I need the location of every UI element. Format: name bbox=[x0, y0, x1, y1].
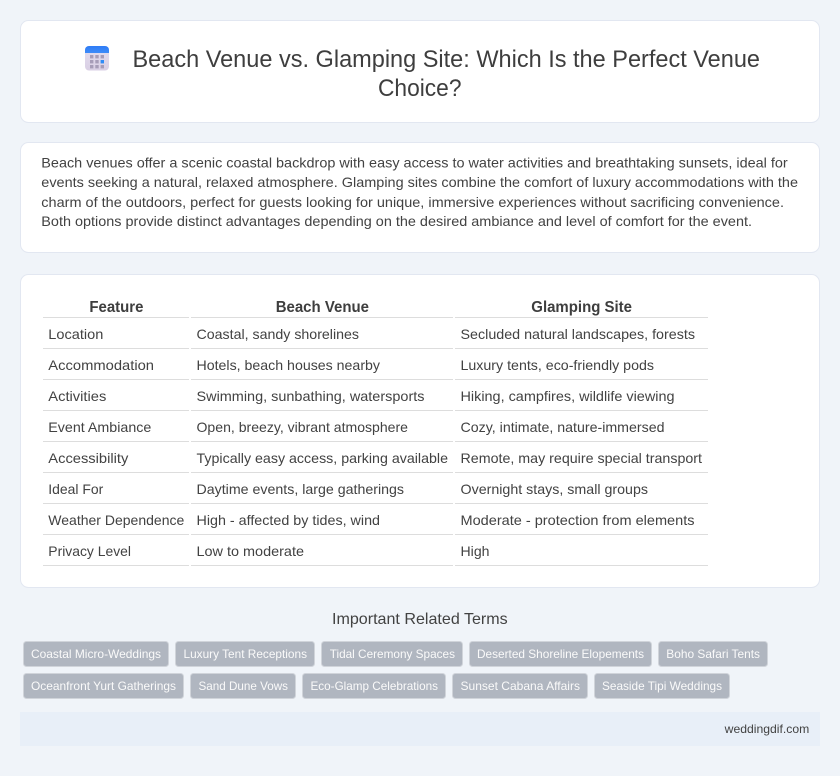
row: Event Ambiance: Open, breezy, vibrant atmosphere bbox=[196, 419, 408, 435]
chip bbox=[470, 642, 652, 666]
chip: Sunset Cabana Affairs bbox=[460, 679, 580, 693]
intro paragraph: Both options provide distinct advantages depending on the desired ambiance and level of comfort for the event. bbox=[41, 213, 752, 229]
row: Weather Dependence: Weather Dependence bbox=[48, 512, 185, 528]
row: Ideal For: Ideal For bbox=[48, 481, 104, 497]
chip bbox=[594, 674, 730, 698]
row: Ideal For bbox=[48, 481, 648, 497]
row: Location: Coastal, sandy shorelines bbox=[196, 326, 359, 342]
chip: Eco-Glamp Celebrations bbox=[310, 679, 438, 693]
chip bbox=[176, 642, 314, 666]
intro paragraph: charm of the outdoors, perfect for guests looking for unique, immersive experiences without sacrificing convenience. bbox=[41, 194, 784, 210]
chip: Tidal Ceremony Spaces bbox=[330, 647, 455, 661]
panel: intro text bbox=[20, 142, 820, 252]
row: Activities bbox=[48, 388, 675, 404]
heading: related terms: Important Related Terms bbox=[332, 611, 508, 628]
chip: Boho Safari Tents bbox=[666, 647, 760, 661]
table header row: Glamping Site bbox=[531, 299, 632, 316]
chip: Luxury Tent Receptions bbox=[184, 647, 307, 661]
row: Accessibility: Typically easy access, parking available bbox=[196, 450, 448, 466]
row: Accommodation: Luxury tents, eco-friendly pods bbox=[460, 357, 654, 373]
chip bbox=[190, 674, 296, 698]
title bbox=[132, 46, 760, 102]
intro paragraph bbox=[41, 154, 798, 229]
intro paragraph: events seeking a natural, relaxed atmosphere. Glamping sites combine the comfort of luxury accommodations with the bbox=[41, 174, 798, 190]
chip: Deserted Shoreline Elopements bbox=[477, 647, 644, 661]
intro paragraph: Beach venues offer a scenic coastal backdrop with easy access to water activities and breathtaking sunsets, ideal for bbox=[41, 154, 788, 170]
row: Activities: Swimming, sunbathing, watersports bbox=[196, 388, 424, 404]
chip bbox=[322, 642, 462, 666]
row: Accessibility bbox=[48, 450, 702, 466]
row: Weather Dependence: Moderate - protection from elements bbox=[460, 512, 694, 528]
footer bbox=[20, 712, 820, 746]
row: Location: Location bbox=[48, 326, 103, 342]
row: Privacy Level: Privacy Level bbox=[48, 543, 131, 559]
row: Accommodation: Hotels, beach houses nearby bbox=[196, 357, 380, 373]
chip: Oceanfront Yurt Gatherings bbox=[31, 679, 176, 693]
footer: weddingdif.com bbox=[724, 722, 809, 736]
table header row: Feature bbox=[89, 299, 143, 316]
row: Event Ambiance bbox=[48, 419, 665, 435]
chip: Sand Dune Vows bbox=[198, 679, 288, 693]
row: Ideal For: Daytime events, large gatherings bbox=[196, 481, 404, 497]
row: Accessibility: Remote, may require special transport bbox=[460, 450, 702, 466]
chip bbox=[24, 674, 184, 698]
chip bbox=[24, 642, 168, 666]
related term chips bbox=[24, 642, 768, 698]
row: Activities: Activities bbox=[48, 388, 106, 404]
row: Event Ambiance: Event Ambiance bbox=[48, 419, 152, 435]
row: Accommodation bbox=[48, 357, 654, 373]
chip: Coastal Micro-Weddings bbox=[31, 647, 161, 661]
row: Activities: Hiking, campfires, wildlife viewing bbox=[460, 388, 674, 404]
chip bbox=[302, 674, 446, 698]
table header row: Beach Venue bbox=[276, 299, 369, 316]
row: Weather Dependence: High - affected by tides, wind bbox=[196, 512, 380, 528]
title: Choice? bbox=[378, 75, 462, 102]
row: Event Ambiance: Cozy, intimate, nature-immersed bbox=[460, 419, 664, 435]
chip bbox=[658, 642, 768, 666]
chip: Seaside Tipi Weddings bbox=[602, 679, 722, 693]
chip bbox=[452, 674, 588, 698]
row: Privacy Level: High bbox=[460, 543, 490, 559]
row: Weather Dependence bbox=[48, 512, 695, 528]
title: Beach Venue vs. Glamping Site: Which Is the Perfect Venue bbox=[132, 46, 760, 73]
row: Location: Secluded natural landscapes, forests bbox=[460, 326, 695, 342]
icon: calendar bbox=[85, 46, 109, 70]
row: Accessibility: Accessibility bbox=[48, 450, 128, 466]
panel: title header bbox=[20, 20, 820, 122]
row: Privacy Level: Low to moderate bbox=[196, 543, 304, 559]
table header row bbox=[89, 299, 632, 316]
panel: comparison table bbox=[20, 274, 820, 588]
row: Location bbox=[48, 326, 695, 342]
row: Ideal For: Overnight stays, small groups bbox=[460, 481, 648, 497]
row: Privacy Level bbox=[48, 543, 490, 559]
row: Accommodation: Accommodation bbox=[48, 357, 154, 373]
